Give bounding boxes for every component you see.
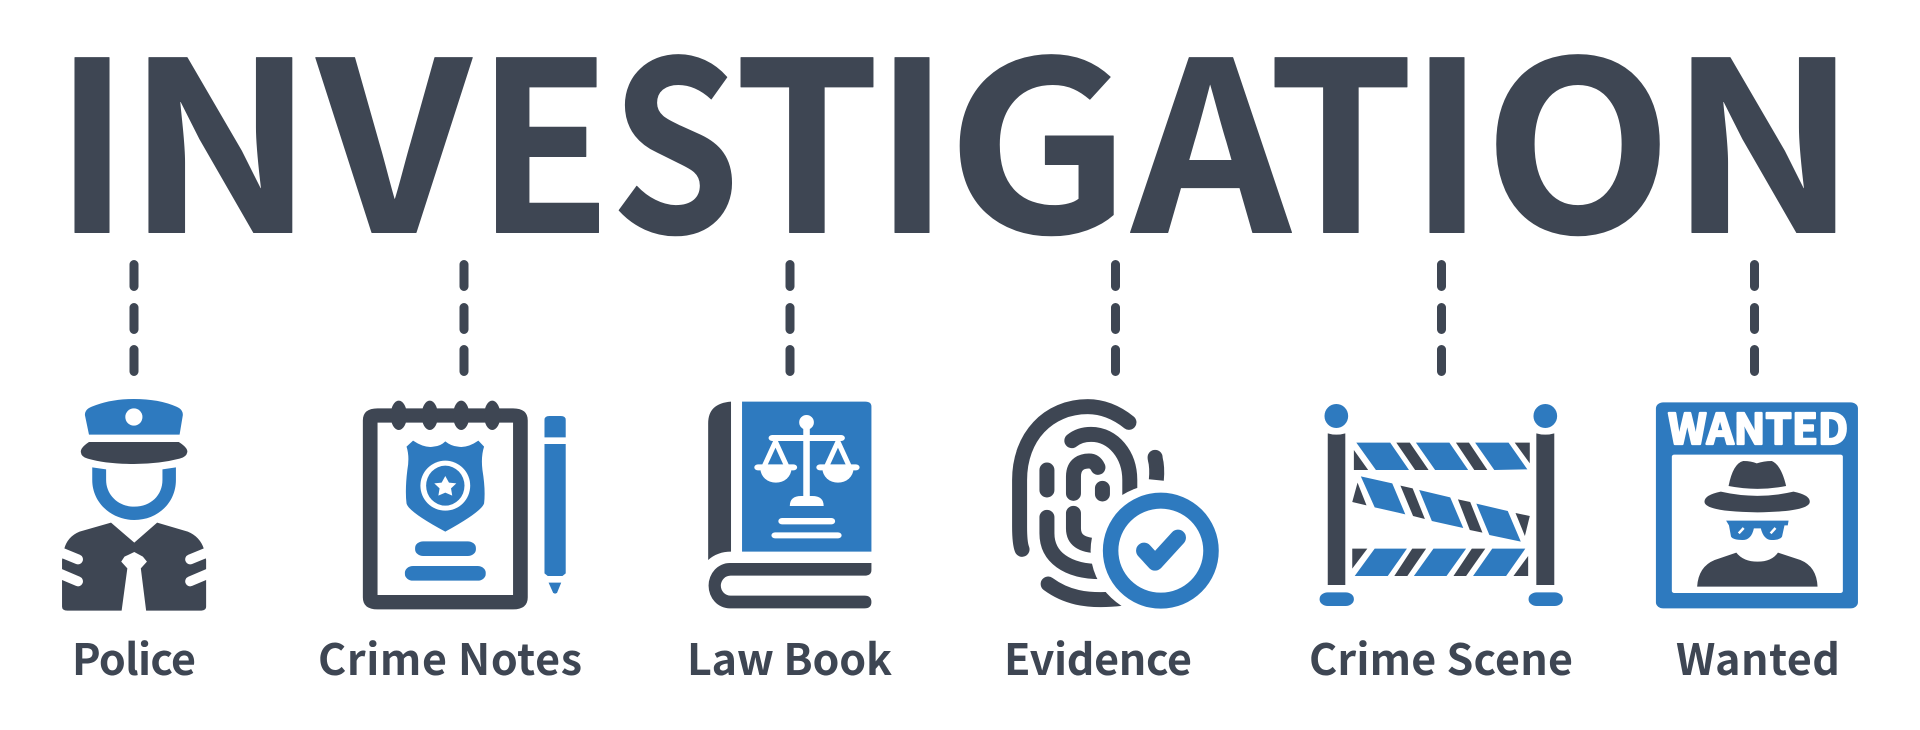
label: Crime Notes: Crime Notes (318, 626, 582, 688)
cap visor (81, 442, 187, 464)
poster art (1656, 402, 1858, 608)
halo behind badge (1091, 484, 1231, 617)
label: Law Book: Law Book (687, 626, 892, 688)
suspect hat (1704, 461, 1810, 512)
shield ring (420, 461, 470, 511)
icon: fingerprint evidence (1020, 407, 1231, 617)
sunglasses glints (1739, 528, 1776, 533)
suspect body (1697, 553, 1818, 587)
note line long (405, 566, 486, 581)
book pages (709, 563, 871, 608)
notebook frame (363, 408, 528, 609)
sleeve stripes (55, 550, 213, 581)
check badge ring (1103, 493, 1219, 609)
icon: crime notes (363, 401, 566, 609)
book spine (708, 402, 731, 560)
poster heading: WANTED (1668, 396, 1848, 457)
notebook rings (391, 401, 500, 430)
poster frame (1656, 402, 1858, 608)
post feet (1320, 592, 1563, 606)
fingerprint ridges (1020, 407, 1157, 600)
label: Police: Police (72, 626, 196, 688)
poster photo area (1672, 455, 1843, 593)
label: Evidence: Evidence (1004, 626, 1192, 688)
post tops (1324, 404, 1557, 428)
top tape (1354, 443, 1530, 470)
icon: crime scene tape (1320, 404, 1563, 606)
label: Crime Scene: Crime Scene (1309, 626, 1573, 688)
police shield (406, 441, 485, 532)
middle tape (1352, 476, 1530, 542)
check mark (1144, 538, 1178, 563)
book cover (742, 402, 871, 552)
label: Wanted: Wanted (1676, 626, 1840, 688)
cap badge (125, 408, 142, 426)
icon: wanted poster (1656, 396, 1858, 608)
dashed connectors (134, 264, 1754, 372)
suspect sunglasses (1726, 521, 1789, 540)
barrier posts (1328, 433, 1554, 585)
icon: law book (708, 402, 871, 608)
uniform body and tie (62, 523, 206, 611)
bottom tape (1352, 549, 1528, 576)
cover text lines (778, 518, 835, 524)
face outline (92, 467, 176, 520)
scales of justice (754, 415, 860, 506)
note line short (415, 541, 476, 556)
pencil (544, 416, 566, 594)
police cap (85, 399, 183, 435)
shield star (434, 476, 456, 496)
icon: police officer (55, 399, 213, 611)
